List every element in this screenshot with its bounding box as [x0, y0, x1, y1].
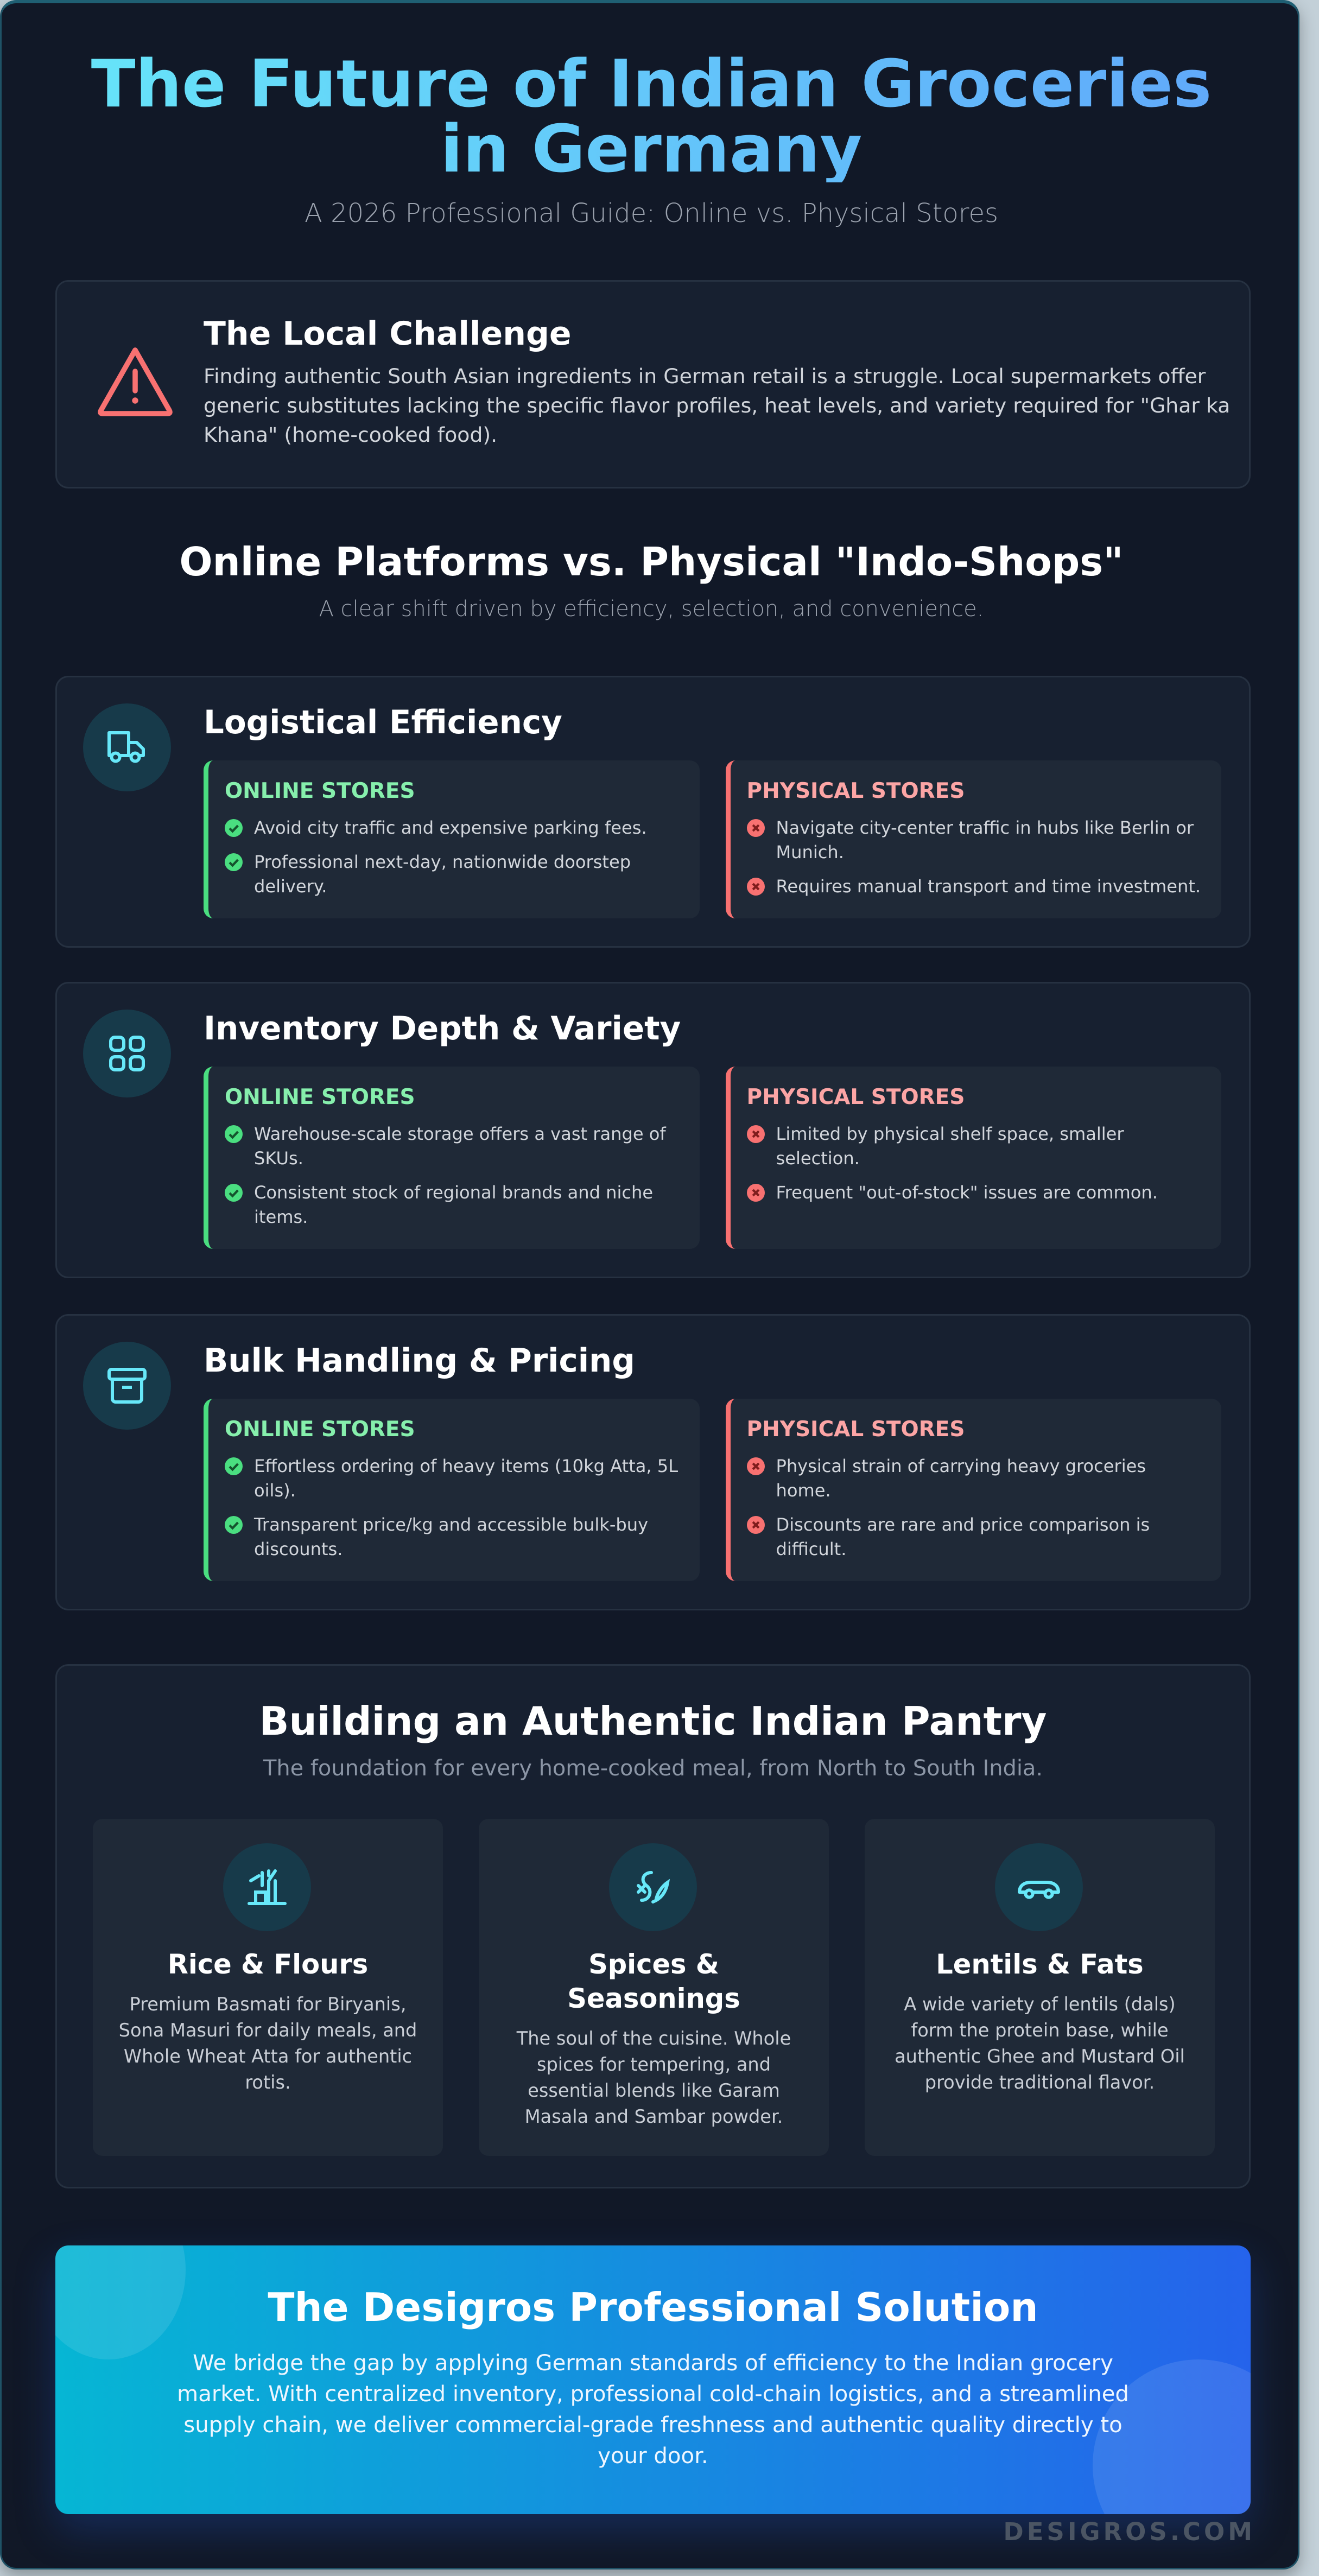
panel: inventory depth	[55, 982, 1251, 1278]
physical column: Munich.	[776, 842, 844, 862]
title: The Future of Indian Groceries	[91, 47, 1212, 122]
online column: delivery.	[254, 876, 327, 897]
card: rice & flours: rotis.	[245, 2072, 291, 2093]
panel: local challenge	[55, 280, 1251, 488]
physical column: Navigate city-center traffic in hubs like Berlin or	[776, 817, 1194, 838]
physical column: Requires manual transport and time investment.	[776, 876, 1201, 897]
banner body: your door.	[598, 2444, 708, 2469]
physical column	[725, 1399, 1221, 1581]
card: rice & flours: Premium Basmati for Biryanis,	[130, 1994, 406, 2015]
card: lentils: A wide variety of lentils (dals)	[904, 1994, 1176, 2015]
online column: Consistent stock of regional brands and niche	[254, 1182, 653, 1203]
online column	[204, 760, 699, 918]
physical column: PHYSICAL STORES	[747, 1085, 965, 1109]
online column: Effortless ordering of heavy items (10kg Atta, 5L	[254, 1456, 678, 1476]
online column: oils).	[254, 1480, 296, 1501]
card: lentils: Lentils & Fats	[936, 1949, 1144, 1980]
icon: wheat	[223, 1843, 311, 1931]
card: rice & flours	[93, 1819, 443, 2156]
physical column: Discounts are rare and price comparison is	[776, 1514, 1150, 1535]
physical column: home.	[776, 1480, 831, 1501]
title: in Germany	[440, 112, 863, 187]
online column: items.	[254, 1207, 308, 1227]
card: spices: spices for tempering, and	[537, 2054, 771, 2075]
card: lentils	[865, 1819, 1215, 2156]
banner body: market. With centralized inventory, professional cold-chain logistics, and a streamlined	[177, 2382, 1129, 2407]
body text: Finding authentic South Asian ingredients in German retail is a struggle. Local supermarkets offer	[204, 364, 1206, 388]
physical column: Frequent "out-of-stock" issues are common.	[776, 1182, 1158, 1203]
footer brand: DESIGROS.COM	[1003, 2517, 1255, 2546]
card: spices	[479, 1819, 829, 2156]
online column: ONLINE STORES	[225, 1085, 415, 1109]
icon: grid	[83, 1010, 171, 1097]
panel: bulk handling: Bulk Handling & Pricing	[204, 1342, 635, 1380]
icon: pepper	[609, 1843, 697, 1931]
banner body	[177, 2351, 1129, 2469]
section heading: Online Platforms vs. Physical "Indo-Shops"	[179, 539, 1124, 585]
physical column: selection.	[776, 1148, 860, 1169]
card: rice & flours: Rice & Flours	[168, 1949, 368, 1980]
banner: solution	[55, 2245, 1251, 2514]
online column: Avoid city traffic and expensive parking fees.	[254, 817, 647, 838]
card: spices: The soul of the cuisine. Whole	[517, 2028, 791, 2049]
card: lentils: form the protein base, while	[911, 2020, 1169, 2041]
panel: pantry	[55, 1664, 1251, 2188]
online column	[204, 1399, 699, 1581]
physical column: Physical strain of carrying heavy groceries	[776, 1456, 1146, 1476]
banner body: We bridge the gap by applying German standards of efficiency to the Indian grocery	[193, 2351, 1113, 2376]
card: spices: essential blends like Garam	[528, 2080, 780, 2101]
online column: ONLINE STORES	[225, 1417, 415, 1442]
physical column: PHYSICAL STORES	[747, 1417, 965, 1442]
online column: ONLINE STORES	[225, 779, 415, 803]
panel: bulk handling	[55, 1314, 1251, 1610]
physical column: Limited by physical shelf space, smaller	[776, 1124, 1124, 1144]
physical column: PHYSICAL STORES	[747, 779, 965, 803]
online column: SKUs.	[254, 1148, 303, 1169]
card: spices: Seasonings	[567, 1983, 740, 2014]
icon: truck	[83, 703, 171, 791]
title	[2, 52, 1301, 182]
subtitle: A 2026 Professional Guide: Online vs. Physical Stores	[305, 198, 998, 229]
online column: Professional next-day, nationwide doorstep	[254, 852, 631, 872]
section subtitle: A clear shift driven by efficiency, selection, and convenience.	[319, 597, 984, 621]
body text: generic substitutes lacking the specific flavor profiles, heat levels, and variety required for "Ghar ka	[204, 394, 1230, 417]
body text	[204, 364, 1230, 447]
physical column	[725, 760, 1221, 918]
card: rice & flours: Sona Masuri for daily meals, and	[119, 2020, 417, 2041]
body text: Khana" (home-cooked food).	[204, 423, 497, 447]
card: rice & flours: Whole Wheat Atta for authentic	[124, 2046, 412, 2067]
panel: logistical efficiency	[55, 676, 1251, 948]
card: lentils: authentic Ghee and Mustard Oil	[895, 2046, 1185, 2067]
online column: discounts.	[254, 1539, 343, 1559]
icon: bean	[995, 1843, 1083, 1931]
online column: Warehouse-scale storage offers a vast range of	[254, 1124, 666, 1144]
pantry heading: Building an Authentic Indian Pantry	[259, 1698, 1047, 1744]
card: lentils: provide traditional flavor.	[925, 2072, 1155, 2093]
online column: Transparent price/kg and accessible bulk-buy	[254, 1514, 648, 1535]
panel: logistical efficiency: Logistical Efficiency	[204, 704, 562, 741]
panel: inventory depth: Inventory Depth & Variety	[204, 1010, 681, 1048]
banner heading: The Desigros Professional Solution	[268, 2285, 1038, 2330]
physical column: difficult.	[776, 1539, 846, 1559]
online column	[204, 1067, 699, 1249]
card: spices: Masala and Sambar powder.	[525, 2106, 783, 2127]
icon: archive box	[83, 1342, 171, 1430]
pantry subtitle: The foundation for every home-cooked meal, from North to South India.	[263, 1756, 1043, 1781]
physical column	[725, 1067, 1221, 1249]
banner body: supply chain, we deliver commercial-grade freshness and authentic quality directly to	[183, 2413, 1123, 2438]
icon: warning	[98, 347, 173, 416]
card: spices: Spices &	[588, 1949, 719, 1980]
heading: The Local Challenge	[204, 315, 572, 353]
